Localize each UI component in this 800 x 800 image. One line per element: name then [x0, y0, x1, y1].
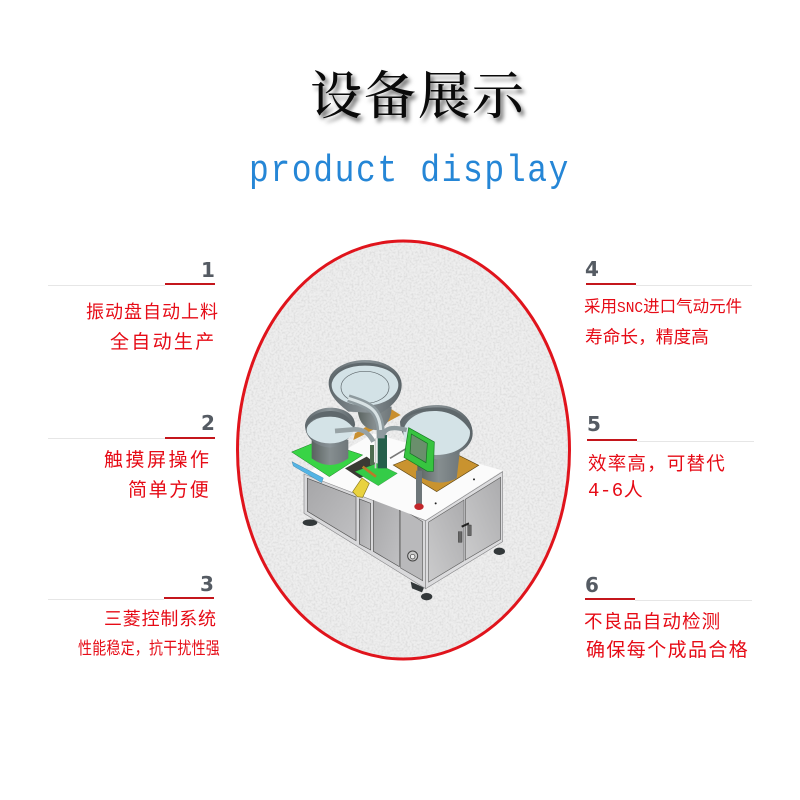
feature 5 [587, 412, 754, 502]
feature 1 [48, 258, 219, 353]
number 1: 1 [201, 258, 215, 282]
feed chutes [335, 398, 407, 442]
text 6: 不良品自动检测 [584, 611, 721, 632]
machine [292, 360, 505, 600]
electronics and mechanism [345, 435, 407, 486]
text 1: 振动盘自动上料 [86, 302, 219, 322]
text 3: 三菱控制系统 [104, 609, 217, 629]
subtitle: product display [249, 150, 570, 193]
left green plate [292, 441, 363, 483]
feature 4: 寿命长，精度高 [585, 327, 709, 347]
number 2: 2 [201, 411, 215, 435]
feet [303, 519, 505, 600]
feature 2: 简单方便 [128, 480, 210, 501]
yellow handle [353, 478, 369, 497]
title: 设备展示 [310, 69, 526, 126]
feature 6: 确保每个成品合格 [586, 640, 749, 661]
table top [305, 433, 503, 520]
number 6: 6 [585, 573, 599, 597]
feature 1: 全自动生产 [110, 332, 217, 353]
support post [414, 471, 424, 510]
central oval with machine illustration [236, 240, 571, 660]
feature 2 [48, 411, 215, 501]
number 3: 3 [200, 572, 214, 596]
rear orange bracket [353, 408, 401, 440]
feature 5: 4-6人 [588, 480, 643, 502]
touch screen [404, 428, 434, 471]
number 5: 5 [587, 412, 601, 436]
bowl left [305, 408, 355, 465]
feature 4 [584, 257, 752, 347]
number 4: 4 [585, 257, 599, 281]
bowl right [400, 405, 473, 483]
oval background [235, 238, 573, 662]
text 4: 采用SNC进口气动元件 [584, 298, 742, 317]
feature 3: 性能稳定，抗干扰性强 [78, 638, 220, 658]
text 2: 触摸屏操作 [104, 450, 212, 471]
cabinet [304, 472, 503, 589]
bowl rear [329, 360, 402, 430]
text 5: 效率高，可替代 [588, 453, 726, 474]
right orange plate [393, 446, 479, 492]
